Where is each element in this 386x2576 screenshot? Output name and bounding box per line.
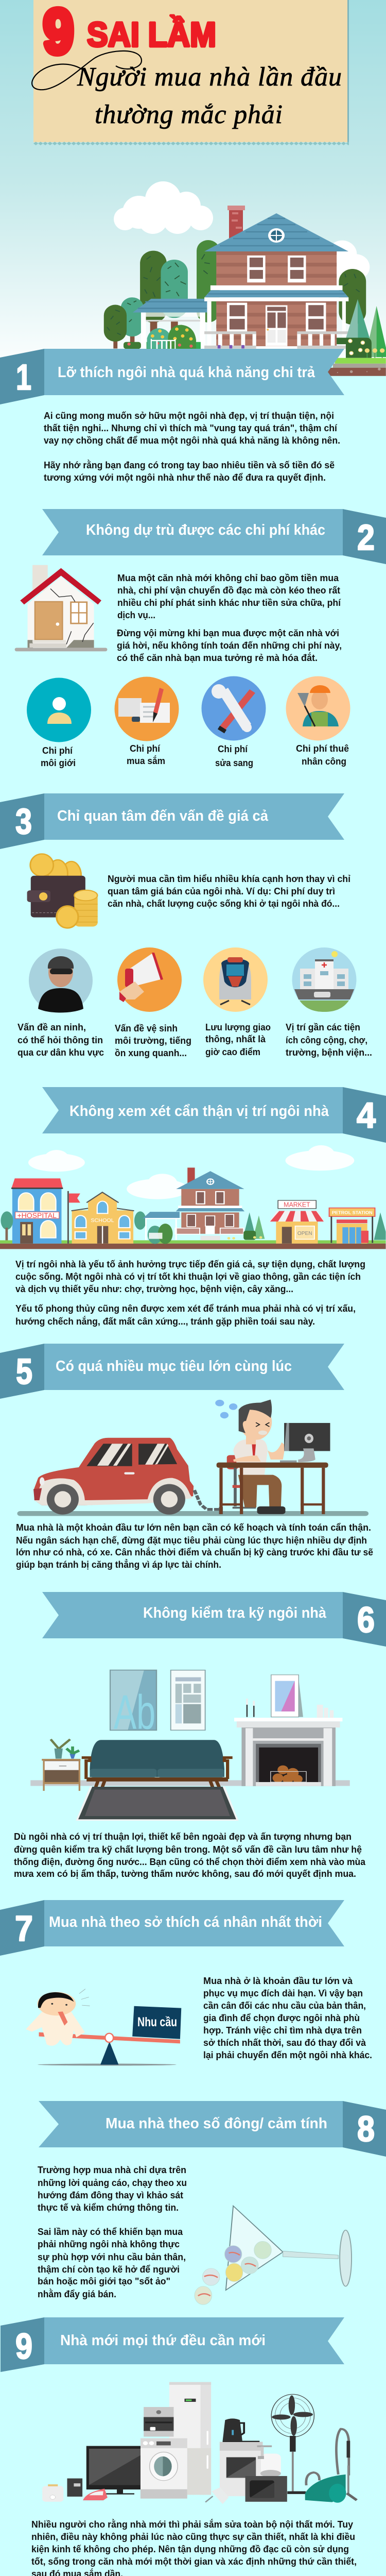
section 4 body text xyxy=(15,1259,365,1327)
concern labels: có thể hỏi thông tin xyxy=(17,1035,103,1045)
section 7 body text: cần cân đối các nhu cầu của bản thân, xyxy=(203,2001,366,2011)
man xyxy=(233,1439,268,1475)
section 7 body text: phục vụ mục đích dài hạn. Vì vậy bạn xyxy=(203,1988,363,1998)
town illustration: MARKET xyxy=(284,1201,310,1208)
section 9 body text: Nhiều người cho rằng nhà mới thì phải sắm sửa toàn bộ nội thất mới. Tuy xyxy=(31,2519,353,2530)
concern labels: môi trường, tiếng xyxy=(115,1036,191,1046)
box xyxy=(132,2006,181,2039)
small left trees xyxy=(130,333,134,348)
illustration: tipped glass with marbles xyxy=(195,2206,352,2304)
lower wall xyxy=(216,301,337,346)
section 8 body text: phải những ngôi nhà không thực xyxy=(38,2239,180,2249)
cooker xyxy=(220,2442,263,2496)
petrol station xyxy=(329,1208,375,1216)
monitor xyxy=(284,1423,330,1451)
section 6 body text: Dù ngôi nhà có vị trí thuận lợi, thiết kế bên ngoài đẹp và ấn tượng nhưng bạn xyxy=(14,1832,352,1842)
section 1 body text: Ai cũng mong muốn sở hữu một ngôi nhà đẹp, vị trí thuận tiện, nội xyxy=(44,411,334,421)
section 9 banner xyxy=(1,2317,344,2372)
mantel picture xyxy=(271,1675,303,1717)
heading 2: Không dự trù được các chi phí khác xyxy=(86,522,325,538)
section 6 body text: đừng quên kiểm tra kỹ chất lượng bên trong. Một số vấn đề cần lưu tâm như hệ xyxy=(14,1844,362,1855)
living room illustration: Ab xyxy=(114,1686,155,1739)
hero illustration: house with trees and clouds xyxy=(104,181,386,376)
fridge xyxy=(169,2382,211,2495)
ground layers xyxy=(335,358,386,364)
cloud left xyxy=(114,181,213,234)
section 7 body text: hợp. Tránh việc chỉ tìm nhà dựa trên xyxy=(203,2025,362,2036)
section 3 body text: Người mua cần tìm hiểu nhiều khía cạnh hơn thay vì chỉ xyxy=(108,874,350,884)
section 5 body text: Nếu ngân sách hạn chế, đừng đặt mục tiêu phải cùng lúc thực hiện nhiều dự định xyxy=(16,1535,367,1546)
section 7 body text: gia đình để chọn được ngôi nhà phù xyxy=(203,2013,360,2023)
plank xyxy=(39,2032,180,2043)
illustration: car chained to stressed man xyxy=(17,1400,369,1516)
hospital xyxy=(12,1188,62,1244)
icon: shopping cost xyxy=(114,677,179,741)
number 6: 6 xyxy=(357,1600,375,1640)
back trees xyxy=(197,240,220,323)
skirting xyxy=(30,1780,350,1786)
school xyxy=(72,1210,133,1244)
number 1: 1 xyxy=(16,357,31,397)
section 1 body text: tương xứng với một ngôi nhà như thế nào để đưa ra quyết định. xyxy=(44,472,326,483)
section 2 body text: nhà, chi phí vận chuyển đồ đạc mà còn kéo theo rất xyxy=(117,585,340,596)
section 2 body text: nhiều chi phí phát sinh khác như tiền sửa chữa, phí xyxy=(117,598,341,608)
section 1 body text: Hãy nhớ rằng bạn đang có trong tay bao nhiêu tiền và số tiền đó sẽ xyxy=(44,460,335,470)
concern labels: thông, nhất là xyxy=(205,1034,266,1044)
phone xyxy=(67,2479,82,2497)
number 4: 4 xyxy=(357,1095,376,1136)
section 9 body text: nhiên, điều này không phải lúc nào cũng thực sự cần thiết, nhất là khi điều xyxy=(31,2532,355,2542)
section 1 body text: thất tiện nghi... Nhưng chỉ vì thích mà "vung tay quá trán", thậm chí xyxy=(44,423,338,433)
heading 3: Chỉ quan tâm đến vấn đề giá cả xyxy=(57,808,269,824)
side table xyxy=(42,1759,80,1761)
script subtitle line 1: Người mua nhà lần đầu xyxy=(77,62,342,92)
script swash of the letter N xyxy=(32,51,142,90)
candles and vases xyxy=(246,1699,334,1718)
heading 5: Có quá nhiều mục tiêu lớn cùng lúc xyxy=(56,1358,292,1375)
heading 8: Mua nhà theo số đông/ cảm tính xyxy=(106,2115,327,2132)
town illustration: +HOSPITAL xyxy=(17,1212,57,1220)
section 4 body text: Vị trí ngôi nhà là yếu tố ảnh hưởng trực tiếp đến giá cả, sự tiện dụng, chất lượng xyxy=(15,1259,365,1269)
lower windows xyxy=(227,303,326,332)
section 5 body text: lớn như có nhà, có xe. Cân nhắc thời điểm và chuẩn bị kỹ càng trước khi đầu tư sẽ xyxy=(16,1547,373,1557)
mincer xyxy=(261,2454,281,2476)
number 5: 5 xyxy=(16,1351,32,1392)
section 7 banner xyxy=(0,1900,344,1956)
script subtitle line 2: thường mắc phải xyxy=(95,100,283,129)
cost labels: Chi phí xyxy=(130,743,161,754)
section 9 body text: tốt, sống trong căn nhà mới một thời gian và xác định những thứ cần thiết, xyxy=(31,2556,357,2567)
cost labels: Chi phí xyxy=(218,744,248,754)
leaf ticks xyxy=(144,254,360,297)
section 6 body text xyxy=(14,1832,366,1879)
title panel xyxy=(32,0,349,145)
number 7: 7 xyxy=(15,1908,33,1948)
cost labels: mua sắm xyxy=(127,755,165,766)
town illustration: SCHOOL xyxy=(91,1218,114,1224)
section 7 body text: Mua nhà ở là khoản đầu tư lớn và xyxy=(203,1976,353,1986)
trees xyxy=(1,1211,13,1230)
house and garden xyxy=(104,240,386,376)
section 8 body text: thực tế và kiểm chứng thông tin. xyxy=(38,2202,179,2213)
fulcrum xyxy=(100,2041,118,2064)
section 8 body text xyxy=(38,2165,187,2299)
section 8 banner xyxy=(39,2101,386,2157)
coffee machine xyxy=(144,2407,173,2437)
hand mixer xyxy=(212,2487,229,2504)
rug xyxy=(76,1787,239,1821)
section 4 body text: và dịch vụ thiết yếu như: chợ, trường học, bệnh viện, cây xăng... xyxy=(15,1284,293,1294)
section 8 body text: những lời quảng cáo, chạy theo xu xyxy=(38,2178,187,2188)
section 9 body text xyxy=(31,2519,357,2576)
section 2 body text: Đừng vội mừng khi bạn mua được một căn nhà với xyxy=(117,628,339,638)
cost labels: nhân công xyxy=(302,756,346,767)
cost labels: sửa sang xyxy=(215,758,253,768)
poster Ab xyxy=(110,1670,156,1730)
front door xyxy=(266,306,287,346)
balcony and eave xyxy=(210,285,343,290)
heading 6: Không kiểm tra kỹ ngôi nhà xyxy=(143,1605,327,1621)
section 1 body text: vay nợ chồng chất để mua một ngôi nhà quá khả năng là không nên. xyxy=(44,435,340,446)
cost labels: môi giới xyxy=(41,758,76,768)
town illustration: OPEN xyxy=(297,1231,312,1236)
section 8 body text: nhằm đẩy giá bán. xyxy=(38,2289,116,2299)
washing machine xyxy=(141,2438,187,2499)
concern labels: trường, bệnh viện... xyxy=(286,1047,372,1058)
fireplace xyxy=(241,1727,336,1786)
section 3 body text: căn nhà, chất lượng cuộc sống khi ở tại ngôi nhà đó... xyxy=(108,899,340,909)
ground line xyxy=(38,2064,177,2065)
roof xyxy=(204,213,348,251)
microwave xyxy=(245,2476,287,2502)
upper wall xyxy=(216,251,337,285)
clouds xyxy=(28,1145,354,1199)
section 5 banner xyxy=(0,1344,344,1399)
house xyxy=(187,1167,195,1184)
car xyxy=(34,1438,194,1505)
concern labels: qua cư dân khu vực xyxy=(17,1047,104,1058)
icon: megaphone xyxy=(117,947,182,1012)
section 9 body text: kiện kinh tế không cho phép. Nên tận dụng những đồ đạc cũ còn sử dụng xyxy=(31,2544,349,2554)
section 1 body text xyxy=(44,411,340,483)
heading 9: Nhà mới mọi thứ đều cần mới xyxy=(60,2332,266,2349)
icon: labour cost xyxy=(286,676,350,741)
icon: wallet with coins xyxy=(27,854,98,928)
section 2 body text: dịch vụ... xyxy=(117,610,155,620)
section 3 body text: quan tâm giá bán của ngôi nhà. Ví dụ: Chi phí duy trì xyxy=(108,886,335,896)
section 8 body text: sự phù hợp với nhu cầu bản thân, xyxy=(38,2252,186,2262)
icon: cracked house xyxy=(15,565,107,651)
section 3 body text xyxy=(108,874,350,909)
bench xyxy=(151,339,176,349)
fan xyxy=(271,2394,314,2437)
heading 7: Mua nhà theo sở thích cá nhân nhất thời xyxy=(49,1914,322,1930)
living room illustration xyxy=(30,1670,350,1821)
concern labels: giờ cao điểm xyxy=(205,1047,260,1057)
ground xyxy=(17,1511,369,1516)
sweat drops xyxy=(215,1400,237,1418)
section 4 banner xyxy=(42,1087,386,1143)
section 1 banner xyxy=(0,349,344,404)
icon: hospital xyxy=(292,947,356,1012)
section 5 body text: Mua nhà là một khoản đầu tư lớn nên bạn cần có kế hoạch và tính toán cẩn thận. xyxy=(16,1522,371,1533)
concern labels: Lưu lượng giao xyxy=(205,1022,271,1032)
section 7 body text: lại phải chuyển đến một ngôi nhà khác. xyxy=(203,2050,372,2060)
concern labels: ồn xung quanh... xyxy=(115,1048,187,1058)
icon: thief xyxy=(29,948,93,1013)
heading 1: Lỡ thích ngôi nhà quá khả năng chi trả xyxy=(58,364,315,381)
carport xyxy=(143,1212,180,1218)
section 8 body text: bán hoặc môi giới tạo "sốt ảo" xyxy=(38,2276,170,2286)
title SAI LẦM: SAI LẦM xyxy=(87,15,216,54)
kettle xyxy=(223,2418,242,2441)
pine trees xyxy=(346,299,358,338)
vacuum cleaner xyxy=(305,2475,346,2502)
concern labels xyxy=(17,1022,372,1058)
section 2 banner xyxy=(42,509,386,564)
concern labels: Vấn đề an ninh, xyxy=(17,1022,86,1032)
ground xyxy=(0,1240,386,1244)
cost labels: Chi phí thuê xyxy=(296,743,349,754)
concern labels: ích công cộng, chợ, xyxy=(286,1035,367,1045)
section 6 body text: thống điện, đường ống nước... Bạn cũng có thể chọn thời điểm xem nhà vào mùa xyxy=(14,1857,366,1867)
illustration: home appliances xyxy=(42,2382,357,2504)
potted plants xyxy=(55,1749,63,1759)
heading 4: Không xem xét cẩn thận vị trí ngôi nhà xyxy=(69,1103,329,1120)
chair xyxy=(227,1455,238,1469)
town illustration xyxy=(0,1145,386,1249)
section 2 body text: giá hời, nếu không tính toán đến những chi phí này, xyxy=(117,640,342,651)
man xyxy=(26,2012,85,2046)
number 2: 2 xyxy=(357,517,375,557)
chimney xyxy=(229,209,243,240)
section 8 body text: hướng đám đông thay vì khảo sát xyxy=(38,2190,183,2200)
section 5 body text: giúp bạn tránh bị căng thẳng vì áp lực tài chính. xyxy=(16,1559,221,1570)
section 4 body text: cuộc sống. Một ngôi nhà có vị trí tốt khi thuận lợi về giao thông, gần các tiện ích xyxy=(15,1272,361,1282)
iron xyxy=(83,2489,108,2500)
section 6 body text: mưa xem có bị ẩm thấp, tường thấm nước không, sau đó mới quyết định mua. xyxy=(14,1869,356,1879)
section 8 body text: Sai lầm này có thể khiến bạn mua xyxy=(38,2227,183,2237)
town illustration: PETROL STATION xyxy=(332,1210,373,1215)
porch posts and railing xyxy=(207,301,346,346)
label on box: Nhu cầu xyxy=(137,2015,177,2029)
desk xyxy=(217,1463,328,1468)
sofa xyxy=(90,1740,224,1777)
number 9: 9 xyxy=(15,2326,32,2366)
number 8: 8 xyxy=(357,2109,375,2149)
pines and bushes xyxy=(243,1212,255,1236)
section 8 body text: Trường hợp mua nhà chỉ dựa trên xyxy=(38,2165,186,2175)
concern labels: Vấn đề vệ sinh xyxy=(115,1023,178,1033)
carport roof xyxy=(133,299,208,313)
section 7 body text: sở thích nhất thời, sau đó thay đổi và xyxy=(203,2038,366,2048)
section 2 body text xyxy=(117,573,342,663)
chain xyxy=(195,1490,221,1510)
section 4 body text: Yếu tố phong thủy cũng nên được xem xét để tránh mua phải nhà có vị trí xấu, xyxy=(15,1303,356,1314)
concern labels: Vị trí gần các tiện xyxy=(286,1022,360,1032)
cloud behind house xyxy=(324,241,370,295)
section 8 body text: thậm chí còn tạo kẽ hở để người xyxy=(38,2264,180,2275)
poster layout xyxy=(171,1670,205,1730)
cost labels xyxy=(41,743,349,768)
cost labels: Chi phí xyxy=(42,745,73,756)
carport posts xyxy=(141,313,205,348)
toaster xyxy=(42,2486,63,2502)
flag xyxy=(67,1191,69,1244)
section 7 body text xyxy=(203,1976,372,2060)
upper windows xyxy=(247,256,306,282)
icon: train xyxy=(203,947,268,1012)
section 5 body text xyxy=(16,1522,373,1570)
flower bushes xyxy=(124,342,141,349)
illustration: seesaw with man and needs box xyxy=(26,1989,181,2065)
round window xyxy=(268,228,285,243)
section 2 body text: Mua một căn nhà mới không chỉ bao gồm tiền mua xyxy=(117,573,339,583)
television xyxy=(86,2446,141,2489)
section 3 banner xyxy=(0,793,344,849)
market xyxy=(276,1222,318,1244)
section 6 banner xyxy=(42,1592,386,1647)
section 2 body text: có thể căn nhà bạn mua tưởng rẻ mà hóa đắt. xyxy=(117,652,318,663)
icon: broker cost xyxy=(27,678,91,742)
section 4 body text: hướng chếch nắng, đất mất cân xứng..., tránh gặp phiền toái sau này. xyxy=(15,1316,315,1327)
number 3: 3 xyxy=(15,801,32,841)
icon: repair cost xyxy=(202,676,266,741)
right-hand bush and flowers xyxy=(337,337,372,358)
